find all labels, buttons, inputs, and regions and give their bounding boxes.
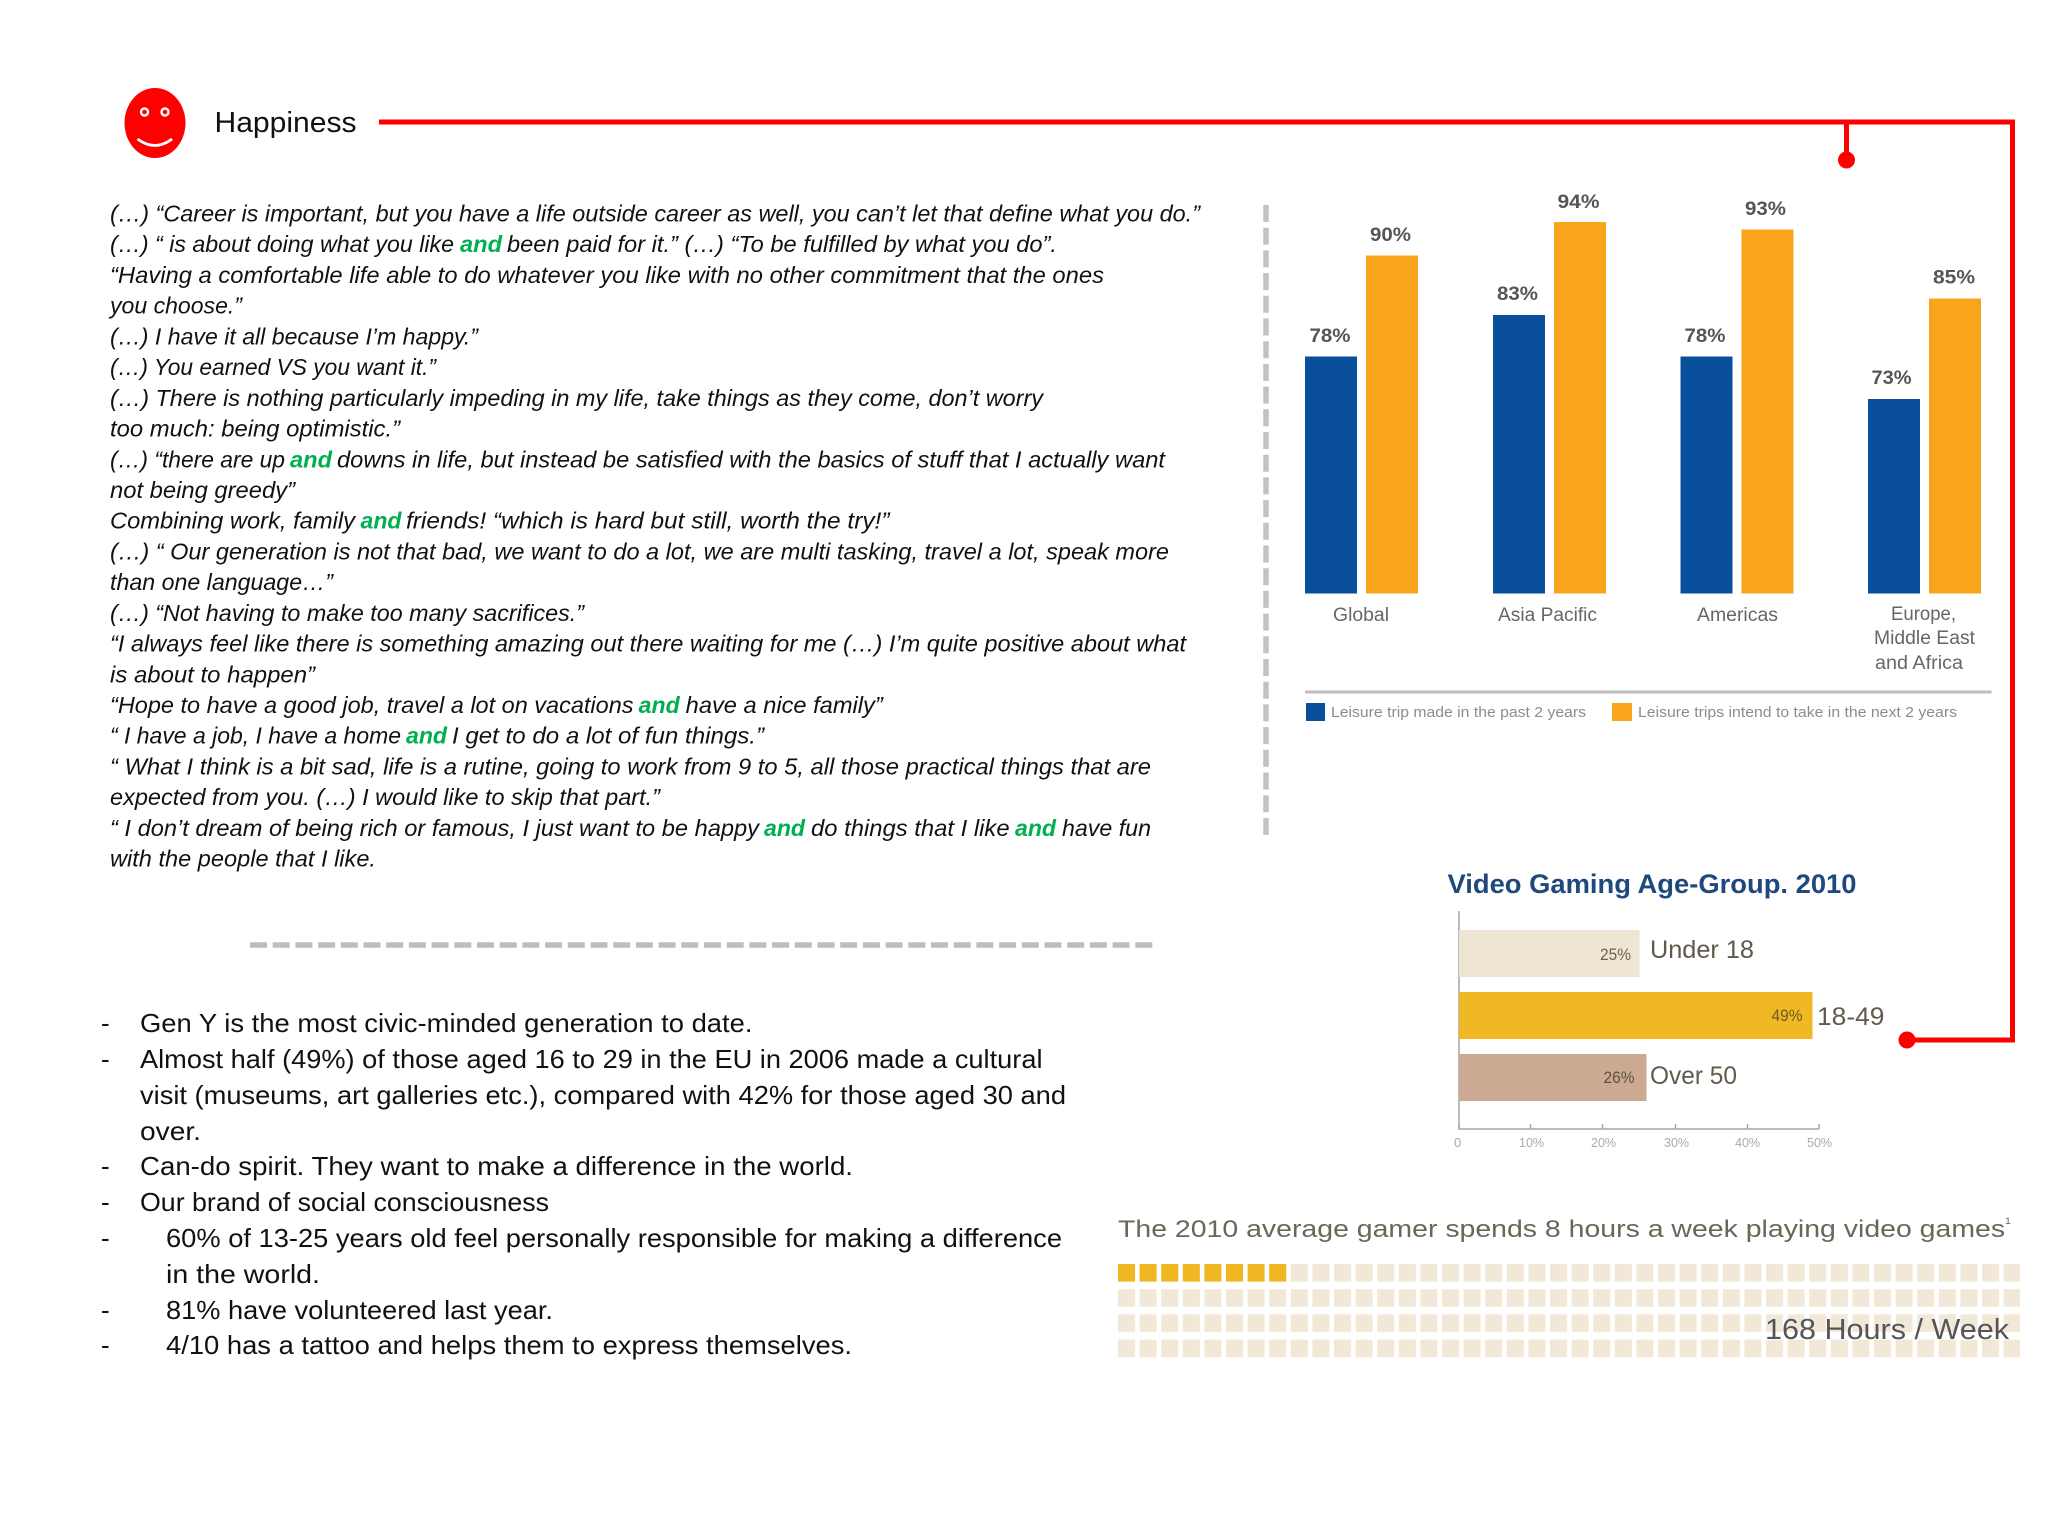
bars: Europe, Middle East and Africa: Europe, (1891, 604, 1956, 625)
text block: Gen Y bullet list: 4/10 has a tattoo and helps them to express themselves. (166, 1330, 852, 1360)
text block: Gen Y bullet list: - (101, 1008, 110, 1038)
red connector line from heading to charts (379, 122, 2012, 1048)
legend: Leisure trip made in the past 2 years (1331, 704, 1586, 721)
text block: interview quotes: and (460, 231, 503, 257)
heading: Video Gaming Age-Group: Video Gaming Age-Group. 2010 (1448, 869, 1856, 899)
text block: interview quotes: been paid for it.” (…) “To be fulfilled by what you do”. (507, 231, 1057, 257)
text block: interview quotes: “ What I think is a bit sad, life is a rutine, going to work from 9 to 5, all those practical things that are (110, 754, 1151, 780)
text block: interview quotes: have fun (1062, 815, 1151, 841)
text block: interview quotes: than one language…” (110, 569, 334, 595)
text block: Gen Y bullet list: visit (museums, art galleries etc.), compared with 42% for those aged 30 and (140, 1080, 1066, 1110)
bars: Asia Pacific: 94% (1558, 192, 1600, 213)
bars: Americas: 93% (1745, 199, 1786, 220)
bar chart: leisure trips by region (1305, 192, 1992, 721)
axis labels: 40% (1735, 1135, 1760, 1150)
bar: Over 50: Over 50 (1650, 1062, 1737, 1090)
bars: Americas (1680, 199, 1794, 626)
text block: interview quotes: Combining work, family (110, 508, 357, 534)
text block: Gen Y bullet list: - (101, 1044, 110, 1074)
text block: interview quotes: “Hope to have a good job, travel a lot on vacations (110, 692, 634, 718)
text block: interview quotes: (…) “there are up (110, 446, 285, 472)
text block: interview quotes: (…) You earned VS you want it.” (110, 354, 437, 380)
bar: 18-49: 49% (1772, 1006, 1802, 1025)
text block: Gen Y bullet list: Gen Y is the most civic-minded generation to date. (140, 1008, 753, 1038)
text block: interview quotes: “Having a comfortable life able to do whatever you like with no other commitment that the ones (110, 262, 1105, 288)
text block: interview quotes: downs in life, but instead be satisfied with the basics of stuff that I actually want (337, 446, 1167, 472)
bars: Asia Pacific: Asia Pacific (1498, 605, 1597, 626)
highlighted 8 hours (1118, 1264, 1286, 1282)
axis labels (1454, 1135, 1832, 1150)
bars: Europe, Middle East and Africa: 85% (1933, 268, 1975, 288)
bars: Europe, Middle East and Africa: Middle East (1874, 628, 1976, 649)
bar: Over 50 (1459, 1054, 1737, 1101)
bars: Americas: 78% (1684, 326, 1726, 347)
text block: interview quotes: (…) “ Our generation is not that bad, we want to do a lot, we are multi tasking, travel a lot, speak more (110, 538, 1169, 564)
waffle chart: 168 hours per week (1118, 1264, 2020, 1358)
text block: interview quotes: and (406, 723, 448, 749)
text block: Gen Y bullet list: over. (140, 1116, 201, 1146)
text block: interview quotes: (…) “Career is important, but you have a life outside career as well, you can’t let that define what you do.” (110, 200, 1201, 226)
text block: interview quotes: and (290, 446, 333, 472)
bar: Under 18: Under 18 (1650, 936, 1754, 964)
bars: Europe, Middle East and Africa (1868, 268, 1981, 674)
axis labels: 20% (1591, 1135, 1616, 1150)
text block: Gen Y bullet list: Almost half (49%) of those aged 16 to 29 in the EU in 2006 made a cultural (140, 1044, 1042, 1074)
bars: Americas: Americas (1697, 605, 1778, 626)
text block: interview quotes: is about to happen” (110, 661, 316, 687)
text block: Gen Y bullet list: - (101, 1187, 110, 1217)
text block: interview quotes: (…) There is nothing particularly impeding in my life, take things as they come, don’t worry (110, 385, 1045, 411)
bar: 18-49: 18-49 (1817, 1003, 1884, 1031)
heading: average gamer hours: The 2010 average gamer spends 8 hours a week playing video games (1118, 1216, 1866, 1243)
text block: interview quotes: I get to do a lot of fun things.” (452, 723, 765, 749)
bars: Global: 90% (1370, 225, 1411, 246)
axis labels: 0 (1454, 1135, 1461, 1150)
text block: interview quotes: have a nice family” (686, 692, 884, 718)
bars: Global: Global (1333, 605, 1389, 626)
text block: Gen Y bullet list: in the world. (166, 1259, 320, 1289)
bar chart: video gaming age groups (1454, 911, 1884, 1150)
axes (1459, 911, 1819, 1129)
bar: Over 50: 26% (1604, 1068, 1634, 1087)
bars: Global: 78% (1310, 326, 1351, 347)
bar: Under 18 (1459, 930, 1754, 977)
text block: interview quotes (108, 200, 1201, 872)
text block: interview quotes: and (360, 508, 402, 534)
text block: interview quotes: you choose.” (108, 293, 243, 319)
icon: red smiley face (124, 88, 186, 158)
text block: interview quotes: “I always feel like there is something amazing out there waiting for me (…) I’m quite positive about what (110, 631, 1188, 657)
text block: Gen Y bullet list: - (101, 1223, 110, 1253)
text block: interview quotes: and (639, 692, 681, 718)
text block: Gen Y bullet list: - (101, 1330, 110, 1360)
legend (1306, 703, 1957, 721)
text block: Gen Y bullet list: Our brand of social consciousness (140, 1187, 549, 1217)
text block: interview quotes: (…) “ is about doing what you like (110, 231, 454, 257)
text block: interview quotes: (…) I have it all because I’m happy.” (110, 323, 479, 349)
bars: Asia Pacific (1493, 192, 1606, 626)
text block: interview quotes: too much: being optimistic.” (110, 416, 401, 442)
text block: interview quotes: and (1015, 815, 1057, 841)
text block: interview quotes: “ I don’t dream of being rich or famous, I just want to be happy (110, 815, 761, 841)
text block: Gen Y bullet list: - (101, 1151, 110, 1181)
axis labels: 10% (1519, 1135, 1544, 1150)
text block: Gen Y bullet list: Can-do spirit. They want to make a difference in the world. (140, 1151, 853, 1181)
text block: Gen Y bullet list: 60% of 13-25 years old feel personally responsible for making a difference (166, 1223, 1062, 1253)
text block: Gen Y bullet list: 81% have volunteered last year. (166, 1295, 553, 1325)
bars: Europe, Middle East and Africa: 73% (1872, 368, 1912, 389)
bar: 18-49 (1459, 992, 1884, 1039)
text block: interview quotes: with the people that I like. (110, 846, 376, 872)
heading: Happiness: Happiness (214, 107, 356, 139)
text block: Gen Y bullet list (101, 1008, 1066, 1360)
label: 168 Hours / Week: 168 Hours / Week (1765, 1314, 2010, 1346)
axis labels: 50% (1807, 1135, 1832, 1150)
text block: interview quotes: not being greedy” (110, 477, 296, 503)
legend: Leisure trips intend to take in the next 2 years (1638, 704, 1957, 721)
bars: Asia Pacific: 83% (1497, 284, 1538, 305)
text block: interview quotes: and (764, 815, 806, 841)
bars: Global (1305, 225, 1418, 626)
text block: interview quotes: expected from you. (…) I would like to skip that part.” (110, 784, 661, 810)
text block: interview quotes: friends! “which is hard but still, worth the try!” (406, 508, 891, 534)
text block: interview quotes: (…) “Not having to make too many sacrifices.” (110, 600, 585, 626)
text block: interview quotes: do things that I like (811, 815, 1010, 841)
bars: Europe, Middle East and Africa: and Africa (1875, 653, 1963, 674)
text block: Gen Y bullet list: - (101, 1295, 110, 1325)
heading: average gamer hours: 1 (2005, 1216, 2011, 1226)
text block: interview quotes: “ I have a job, I have a home (110, 723, 401, 749)
axis labels: 30% (1664, 1135, 1689, 1150)
bar: Under 18: 25% (1600, 945, 1631, 964)
